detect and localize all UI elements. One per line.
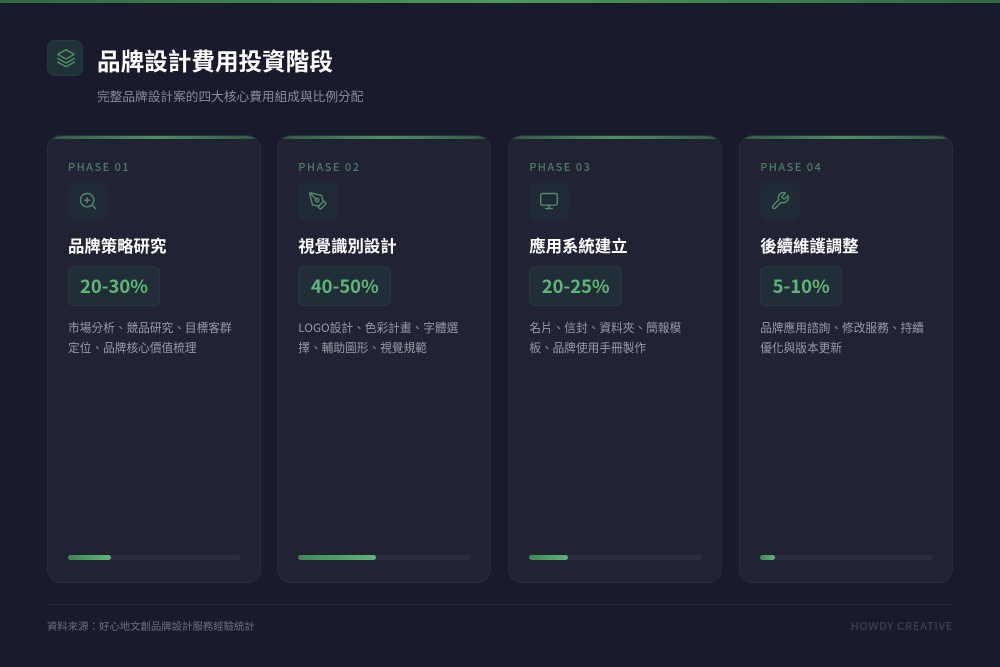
description 03: 名片、信封、資料夾、簡報模 bbox=[529, 319, 681, 336]
source note: 資料來源：好心地文創品牌設計服務經驗統計 bbox=[47, 618, 255, 633]
description 01: 市場分析、競品研究、目標客群 bbox=[68, 319, 232, 336]
phase label 04: PHASE 04 bbox=[760, 159, 822, 175]
description 03 bbox=[529, 319, 681, 356]
description 02 bbox=[298, 319, 458, 356]
phase label 01: PHASE 01 bbox=[68, 159, 130, 175]
percentage 02 bbox=[298, 266, 391, 306]
panel: phase 03 bbox=[508, 135, 722, 583]
progress bar 04 bbox=[760, 555, 933, 560]
description 03: 板、品牌使用手冊製作 bbox=[529, 339, 646, 356]
phase label 02: PHASE 02 bbox=[298, 159, 360, 175]
icon: wrench bbox=[760, 181, 800, 221]
top accent bar bbox=[0, 0, 1000, 3]
icon: layers logo bbox=[47, 40, 83, 76]
icon: zoom in bbox=[68, 181, 108, 221]
description 04: 優化與版本更新 bbox=[760, 339, 842, 356]
heading 03: 應用系統建立 bbox=[529, 233, 628, 257]
percentage 04: 5-10% bbox=[773, 273, 830, 299]
description 04: 品牌應用諮詢、修改服務、持續 bbox=[760, 319, 924, 336]
heading 01: 品牌策略研究 bbox=[68, 233, 166, 257]
progress bar 01 bbox=[68, 555, 241, 560]
description 04 bbox=[760, 319, 924, 356]
icon: pen tool bbox=[298, 181, 338, 221]
description 02: 擇、輔助圖形、視覺規範 bbox=[298, 339, 427, 356]
progress bar 03 bbox=[529, 555, 702, 560]
heading 02: 視覺識別設計 bbox=[298, 233, 397, 257]
description 01 bbox=[68, 319, 232, 356]
description 02: LOGO設計、色彩計畫、字體選 bbox=[298, 319, 458, 336]
percentage 03 bbox=[529, 266, 622, 306]
icon: monitor bbox=[529, 181, 569, 221]
progress bar 02 bbox=[298, 555, 471, 560]
panel: phase 04 bbox=[739, 135, 953, 583]
description 01: 定位、品牌核心價值梳理 bbox=[68, 339, 197, 356]
percentage 02: 40-50% bbox=[311, 273, 379, 299]
title: 品牌設計費用投資階段 bbox=[97, 43, 333, 77]
heading 04: 後續維護調整 bbox=[760, 233, 859, 257]
phase label 03: PHASE 03 bbox=[529, 159, 591, 175]
brand name: HOWDY CREATIVE bbox=[851, 618, 953, 634]
percentage 01: 20-30% bbox=[80, 273, 148, 299]
percentage 03: 20-25% bbox=[542, 273, 610, 299]
percentage 04 bbox=[760, 266, 842, 306]
panel: phase 02 bbox=[277, 135, 491, 583]
panel: phase 01 bbox=[47, 135, 261, 583]
subtitle: 完整品牌設計案的四大核心費用組成與比例分配 bbox=[97, 86, 363, 105]
percentage 01 bbox=[68, 266, 160, 306]
